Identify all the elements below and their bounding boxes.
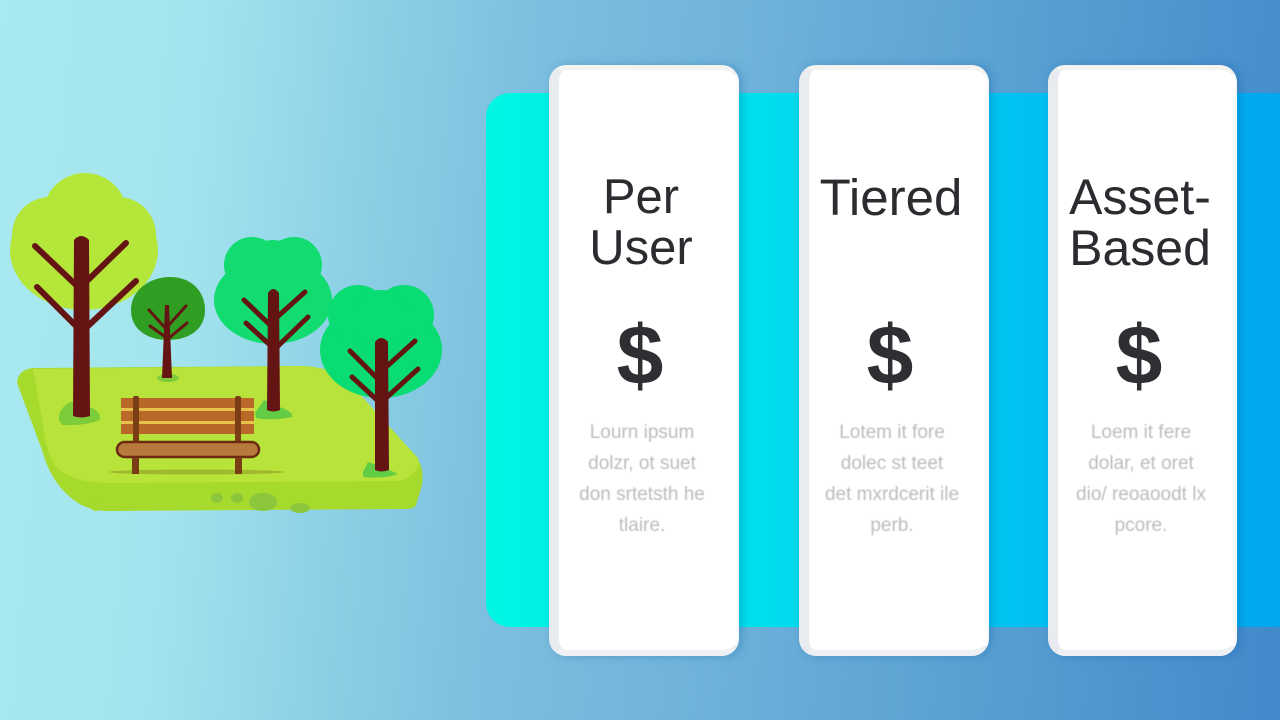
text block: dolzr, ot suet	[588, 453, 696, 474]
panel: Asset-Based card	[1048, 65, 1237, 656]
text block: Lotem it fore	[839, 422, 945, 443]
text block: det mxrdcerit ile	[825, 484, 959, 505]
panel: colored band behind cards	[486, 93, 1280, 627]
text block: don srtetsth he	[579, 484, 705, 505]
panel: Per User card	[549, 65, 739, 656]
heading: Based	[1069, 220, 1211, 276]
heading	[1069, 169, 1211, 276]
heading: Asset-	[1069, 169, 1211, 225]
illustration: park	[10, 173, 442, 513]
text block	[579, 422, 705, 536]
tree: right green	[320, 285, 442, 478]
icon: dollar: $	[617, 308, 663, 402]
heading: User	[589, 221, 693, 275]
panel: Tiered card	[799, 65, 989, 656]
icon: dollar: $	[1116, 308, 1162, 402]
tree: large lime	[10, 173, 158, 425]
text block	[1076, 422, 1206, 536]
text block: dolec st teet	[841, 453, 943, 474]
heading	[589, 170, 693, 275]
text block: perb.	[870, 515, 914, 536]
tree: small dark green	[131, 277, 205, 382]
text block: pcore.	[1115, 515, 1167, 536]
text block: Loem it fere	[1091, 422, 1191, 443]
text block: dio/ reoaoodt lx	[1076, 484, 1206, 505]
text block	[825, 422, 959, 536]
heading: Tiered	[820, 169, 962, 226]
ground: grass island	[17, 366, 422, 513]
text block: tlaire.	[619, 515, 665, 536]
text block: Lourn ipsum	[590, 422, 694, 443]
tree: medium green	[214, 237, 332, 419]
bench	[109, 396, 285, 474]
icon: dollar: $	[867, 308, 913, 402]
heading: Per	[603, 170, 679, 224]
text block: dolar, et oret	[1088, 453, 1194, 474]
